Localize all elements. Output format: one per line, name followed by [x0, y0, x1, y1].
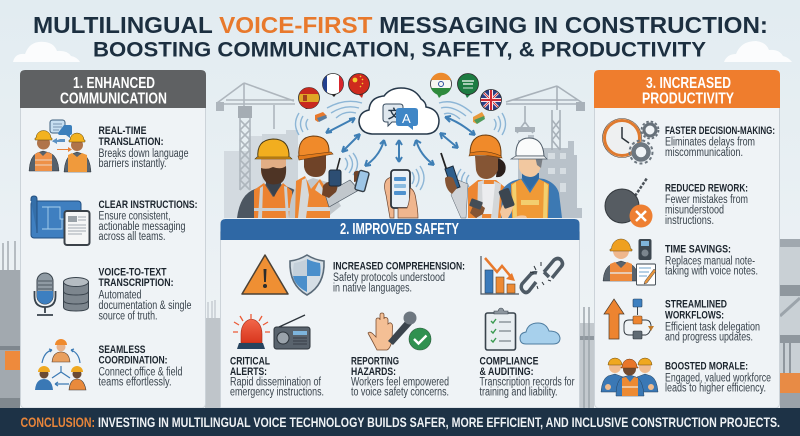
flag: United Kingdom — [480, 90, 502, 110]
text: reporting hazards: HAZARDS: — [351, 366, 396, 378]
worker 3: woman with orange hard hat and radio — [441, 135, 512, 218]
text: clear instructions: CLEAR INSTRUCTIONS: — [98, 199, 198, 211]
worker 1: yellow hard hat and beard — [237, 139, 304, 218]
text: voice-to-text transcription: documentation & single — [98, 300, 192, 312]
text: compliance and auditing: & AUDITING: — [480, 366, 534, 378]
text: critical alerts: emergency instructions. — [230, 386, 324, 398]
text: real-time translation: barriers instantly. — [98, 158, 166, 170]
text: streamlined workflows: Efficient task delegation — [665, 322, 760, 334]
icon: siren and radio — [233, 314, 310, 349]
icon: falling chart — [481, 256, 519, 294]
icon: raised hand, microphone and check — [368, 312, 431, 350]
panel header: PRODUCTIVITY — [642, 90, 735, 108]
text: clear instructions — [98, 199, 198, 243]
text: reduced rework: REDUCED REWORK: — [665, 182, 748, 194]
icon: translation cloud: 文 — [388, 106, 401, 121]
text: boosted morale — [665, 360, 771, 394]
text: clear instructions: actionable messaging — [98, 221, 186, 233]
small flags on waves — [315, 112, 485, 124]
text: streamlined workflows — [665, 298, 760, 344]
flag: France — [322, 74, 344, 97]
text: seamless coordination: COORDINATION: — [98, 354, 168, 366]
text: voice-to-text transcription: Automated — [98, 290, 142, 302]
text: voice-to-text transcription: VOICE-TO-TEXT — [98, 266, 167, 278]
flag: Saudi Arabia — [458, 74, 478, 98]
worker 4: white hard hat and blue shirt — [498, 138, 562, 218]
icon: clock and gears — [602, 118, 658, 164]
text: streamlined workflows: STREAMLINED — [665, 298, 727, 310]
icon: broken chain — [521, 258, 562, 292]
text: compliance and auditing — [480, 356, 575, 398]
panel header: 1. ENHANCED — [73, 75, 155, 92]
icon: translation cloud — [359, 88, 439, 134]
icon: warning triangle and shield — [242, 255, 324, 295]
panel header — [20, 70, 206, 108]
panel header: 2. IMPROVED SAFETY — [340, 221, 459, 238]
text: voice-to-text transcription — [98, 266, 192, 322]
text: reduced rework: Fewer mistakes from — [665, 194, 748, 206]
text: real-time translation: TRANSLATION: — [98, 136, 164, 148]
text: voice-to-text transcription: TRANSCRIPTION: — [98, 277, 174, 289]
text: boosted morale: BOOSTED MORALE: — [665, 360, 748, 372]
text: faster decision-making: miscommunication. — [665, 147, 743, 159]
text: time savings: Replaces manual note- — [665, 256, 755, 268]
arrows between cloud and workers — [326, 116, 475, 166]
panel body — [20, 72, 206, 408]
title — [33, 12, 768, 62]
text: boosted morale: leads to higher efficiency. — [665, 382, 766, 394]
text: streamlined workflows: WORKFLOWS: — [665, 310, 724, 322]
hand holding smartphone — [385, 170, 418, 218]
panel: 2. improved safety — [220, 219, 580, 408]
text: critical alerts: Rapid dissemination of — [230, 376, 322, 388]
icon: blueprint and tablet — [31, 196, 90, 245]
flag: Spain — [298, 88, 320, 109]
flag: India — [430, 73, 452, 98]
icon: team coordination — [35, 339, 86, 390]
icon: worker with recorder and notes — [603, 239, 656, 285]
text: clear instructions: Ensure consistent, — [98, 210, 170, 222]
flag: China — [348, 74, 370, 98]
text: increased comprehension: in native languages. — [333, 282, 412, 294]
text: increased comprehension: Safety protocols understood — [333, 272, 445, 284]
text: increased comprehension — [333, 260, 465, 294]
central scene: workers connected through cloud translation — [216, 73, 585, 218]
text: clear instructions: across all teams. — [98, 231, 166, 243]
icon: upward arrow and workflow — [604, 299, 654, 339]
text: reporting hazards: Workers feel empowered — [351, 376, 449, 388]
text: increased comprehension: INCREASED COMPREHENSION: — [333, 260, 465, 272]
icon: wrecking ball with cross — [605, 178, 652, 228]
icon: microphone and database — [34, 273, 88, 315]
icon: clipboard and cloud — [486, 308, 560, 350]
text: real-time translation — [98, 125, 188, 170]
text: time savings: TIME SAVINGS: — [665, 244, 731, 256]
icon: happy team — [601, 358, 658, 396]
right crane and building — [505, 86, 585, 218]
conclusion banner: CONCLUSION: — [20, 414, 95, 430]
left crane and buildings — [216, 83, 298, 218]
title: BOOSTING COMMUNICATION, SAFETY, & PRODUCTIVITY — [93, 38, 706, 62]
text: faster decision-making — [665, 125, 775, 159]
text: reduced rework — [665, 182, 748, 227]
text: time savings — [665, 244, 758, 278]
text: seamless coordination: teams effortlessly. — [98, 376, 172, 388]
panel: 3. increased productivity — [594, 70, 780, 408]
title: MULTILINGUAL VOICE-FIRST MESSAGING IN CONSTRUCTION: — [33, 12, 768, 38]
text: critical alerts: CRITICAL — [230, 356, 270, 368]
text: compliance and auditing: COMPLIANCE — [480, 356, 538, 368]
text: time savings: taking with voice notes. — [665, 266, 758, 278]
text: critical alerts: ALERTS: — [230, 366, 267, 378]
panel header: 3. INCREASED — [646, 75, 731, 92]
panel header — [220, 219, 580, 240]
text: seamless coordination: Connect office & field — [98, 366, 182, 378]
icon: two workers translating — [29, 120, 91, 172]
text: seamless coordination — [98, 344, 182, 388]
text: streamlined workflows: and progress updates. — [665, 332, 753, 344]
text: reporting hazards — [351, 356, 449, 398]
text: reduced rework: misunderstood — [665, 204, 724, 216]
text: voice-to-text transcription: source of truth. — [98, 310, 158, 322]
text: real-time translation: Breaks down language — [98, 148, 188, 160]
text: reporting hazards: REPORTING — [351, 356, 399, 368]
signal waves — [296, 101, 506, 193]
text: compliance and auditing: Transcription records for — [480, 376, 575, 388]
text: reduced rework: instructions. — [665, 215, 714, 227]
text: real-time translation: REAL-TIME — [98, 125, 146, 137]
conclusion banner — [0, 408, 800, 436]
panel body — [594, 72, 780, 408]
panel body — [220, 232, 580, 408]
panel: 1. enhanced communication — [20, 70, 206, 408]
panel header: COMMUNICATION — [60, 90, 167, 108]
worker 2: orange hard hat with radio and phone — [289, 136, 369, 218]
text: faster decision-making: Eliminates delays from — [665, 136, 755, 148]
text: critical alerts — [230, 356, 324, 398]
icon: translation cloud: A — [402, 111, 411, 126]
text: compliance and auditing: training and liability. — [480, 386, 558, 398]
text: reporting hazards: to voice safety concerns. — [351, 386, 449, 398]
panel header — [594, 70, 780, 108]
text: seamless coordination: SEAMLESS — [98, 344, 146, 356]
